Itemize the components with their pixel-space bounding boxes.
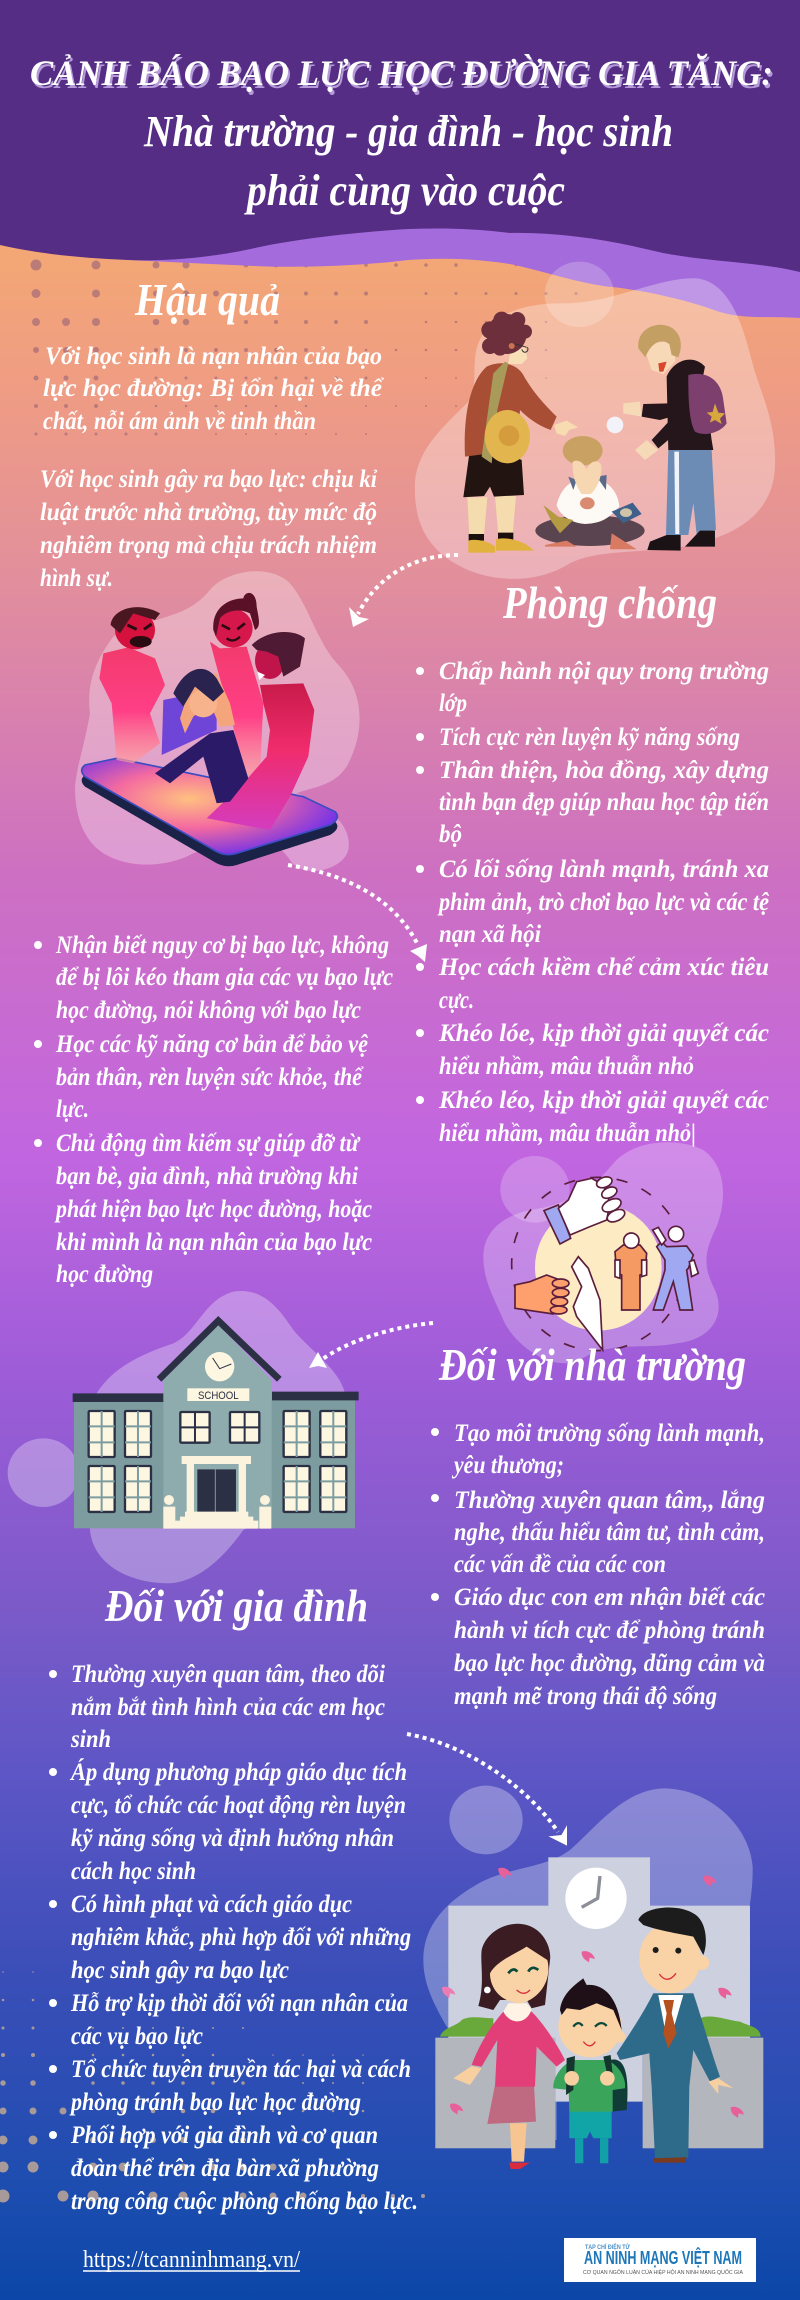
title [30, 53, 773, 215]
list: family actions: cách học sinh [71, 1858, 196, 1885]
list: school actions: hành vi tích cực để phòng tránh [454, 1617, 765, 1644]
text block: victims: lực học đường: Bị tổn hại về thể [43, 375, 384, 402]
panel: prevention [416, 577, 770, 1147]
list: student actions: phát hiện bạo lực học đường, hoặc [54, 1196, 372, 1223]
list: school actions: bạo lực học đường, dũng cảm và [454, 1650, 765, 1677]
title: CẢNH BÁO BẠO LỰC HỌC ĐƯỜNG GIA TĂNG: [30, 53, 773, 93]
title: Nhà trường - gia đình - học sinh [143, 107, 673, 156]
illustration: fists and stop gesture [483, 1142, 723, 1363]
list: school actions: nghe, thấu hiểu tâm tư, tình cảm, [454, 1519, 765, 1546]
halftone dots: bottom left [3, 1972, 453, 2196]
list: prevention items: Khéo lóe, kịp thời giải quyết các [438, 1020, 769, 1047]
list: prevention items: bộ [439, 821, 462, 848]
text block: victims: Với học sinh là nạn nhân của bạo [45, 343, 382, 370]
text block: perpetrators: luật trước nhà trường, tùy mức độ [40, 499, 377, 526]
right student [623, 325, 727, 551]
list: student actions: học đường [56, 1261, 153, 1288]
arrow: dotted to prevention list [288, 865, 427, 962]
fist bottom [515, 1275, 569, 1314]
panel: school [431, 1339, 765, 1710]
list: student actions: Nhận biết nguy cơ bị bạo lực, không [55, 932, 389, 959]
list: family actions: Hỗ trợ kịp thời đối với nạn nhân của [70, 1990, 408, 2017]
list: family actions: Áp dụng phương pháp giáo dục tích [69, 1758, 407, 1786]
list: prevention items: Khéo léo, kịp thời giải quyết các [438, 1087, 769, 1114]
list: school actions: Tạo môi trường sống lành mạnh, [454, 1420, 765, 1447]
list: student actions [34, 932, 393, 1288]
arrow: dotted to phone illustration [349, 555, 458, 627]
arrow: dotted to family illustration [407, 1734, 566, 1844]
panel: consequences [40, 274, 384, 592]
heading: prevention: Phòng chống [502, 577, 717, 628]
logo [564, 2238, 756, 2282]
list: family actions: học sinh gây ra bạo lực [71, 1957, 289, 1984]
logo: CƠ QUAN NGÔN LUẬN CỦA HIỆP HỘI AN NINH MẠNG QUỐC GIA [583, 2268, 743, 2276]
list: student actions: để bị lôi kéo tham gia các vụ bạo lực [56, 964, 393, 991]
list: family actions: nghiêm khắc, phù hợp đối với những [71, 1924, 411, 1951]
list: school actions: Thường xuyên quan tâm,, lắng [454, 1487, 765, 1514]
bully left [99, 607, 165, 763]
text block: victims: chất, nỗi ám ảnh về tinh thần [43, 408, 316, 435]
list: school actions: Giáo dục con em nhận biết các [454, 1584, 765, 1611]
left student [463, 312, 578, 553]
list: student actions: học đường, nói không với bạo lực [56, 997, 361, 1024]
fist top [544, 1175, 627, 1244]
list: family actions: phòng tránh bạo lực học đường [69, 2089, 361, 2116]
stop hand [572, 1257, 603, 1350]
illustration: victim surrounded by bullies on phone [75, 571, 360, 871]
arrow: dotted to school illustration [309, 1323, 433, 1368]
list: family actions [49, 1661, 418, 2215]
list: prevention items: hiểu nhầm, mâu thuẫn nhỏ [439, 1053, 694, 1080]
list: prevention items: Có lối sống lành mạnh, tránh xa [439, 856, 769, 883]
list: prevention items: nạn xã hội [439, 921, 541, 948]
list: prevention items [416, 658, 770, 1147]
title: phải cùng vào cuộc [243, 166, 565, 215]
list: family actions: Tổ chức tuyên truyền tác hại và cách [71, 2056, 411, 2083]
list: prevention items: Tích cực rèn luyện kỹ năng sống [439, 724, 740, 751]
list: prevention items: tình bạn đẹp giúp nhau học tập tiến [439, 789, 769, 816]
list: student actions: Học các kỹ năng cơ bản để bảo vệ [55, 1031, 369, 1058]
text block: perpetrators: nghiêm trọng mà chịu trách nhiệm [40, 532, 377, 559]
heading: consequences: Hậu quả [134, 274, 280, 325]
bully girl [210, 593, 263, 777]
crumpled paper [607, 417, 623, 433]
figure right [653, 1226, 698, 1310]
halftone dots: top left [36, 265, 606, 434]
phone [82, 758, 337, 866]
panel: family [49, 1580, 418, 2215]
illustration: family in front of school [423, 1786, 763, 2169]
list: student actions: bản thân, rèn luyện sức khỏe, thể [56, 1064, 364, 1091]
list: prevention items: hiểu nhầm, mâu thuẫn nhỏ| [439, 1120, 696, 1147]
list: prevention items: cực. [439, 987, 474, 1014]
list: school actions [431, 1420, 765, 1710]
figure centre [615, 1233, 647, 1310]
illustration: school building: SCHOOL [198, 1390, 239, 1402]
list: family actions: nắm bắt tình hình của các em học [71, 1694, 385, 1721]
list: school actions: các vấn đề của các con [454, 1551, 666, 1578]
heading: school: Đối với nhà trường [438, 1339, 746, 1390]
list: student actions: khi mình là nạn nhân của bạo lực [56, 1229, 372, 1256]
list: student actions: lực. [56, 1096, 89, 1123]
list: student actions: bạn bè, gia đình, nhà trường khi [56, 1163, 358, 1190]
list: prevention items: lớp [439, 690, 467, 717]
victim [155, 669, 248, 803]
crying student [535, 436, 645, 549]
list: prevention items: Thân thiện, hòa đồng, xây dựng [439, 757, 769, 784]
website link: https://tcanninhmang.vn/ [83, 2247, 300, 2273]
header band [0, 0, 800, 318]
list: prevention items: Học cách kiềm chế cảm xúc tiêu [438, 954, 769, 981]
boy [553, 1978, 627, 2163]
mother [453, 1924, 565, 2169]
list: family actions: cực, tổ chức các hoạt động rèn luyện [71, 1792, 406, 1819]
text block: perpetrators: Với học sinh gây ra bạo lực: chịu kỉ [40, 466, 378, 493]
father [617, 1908, 733, 2163]
illustration: three students bullying scene [415, 262, 775, 579]
list: family actions: Thường xuyên quan tâm, theo dõi [71, 1661, 385, 1688]
list: family actions: trong công cuộc phòng chống bạo lực. [71, 2188, 418, 2215]
list: family actions: Phối hợp với gia đình và cơ quan [70, 2122, 378, 2149]
list: student actions: Chủ động tìm kiếm sự giúp đỡ từ [56, 1130, 361, 1157]
petals [442, 1868, 744, 2118]
list: prevention items: phim ảnh, trò chơi bạo lực và các tệ [437, 889, 770, 916]
logo: TẠP CHÍ ĐIỆN TỬ [585, 2242, 630, 2251]
illustration: school building [8, 1291, 359, 1583]
list: prevention items: Chấp hành nội quy trong trường [439, 658, 769, 685]
list: school actions: yêu thương; [451, 1452, 564, 1479]
text block: perpetrators [40, 466, 378, 592]
list: family actions: Có hình phạt và cách giáo dục [71, 1891, 352, 1918]
list: family actions: kỹ năng sống và định hướng nhân [71, 1825, 394, 1852]
text block: perpetrators: hình sự. [40, 565, 113, 592]
heading: family: Đối với gia đình [104, 1580, 368, 1631]
text block: victims [43, 343, 384, 435]
list: family actions: sinh [70, 1726, 111, 1753]
list: school actions: mạnh mẽ trong thái độ sống [454, 1683, 717, 1710]
list: family actions: đoàn thể trên địa bàn xã phường [71, 2155, 379, 2182]
bully right [207, 632, 314, 830]
list: family actions: các vụ bạo lực [71, 2023, 203, 2050]
